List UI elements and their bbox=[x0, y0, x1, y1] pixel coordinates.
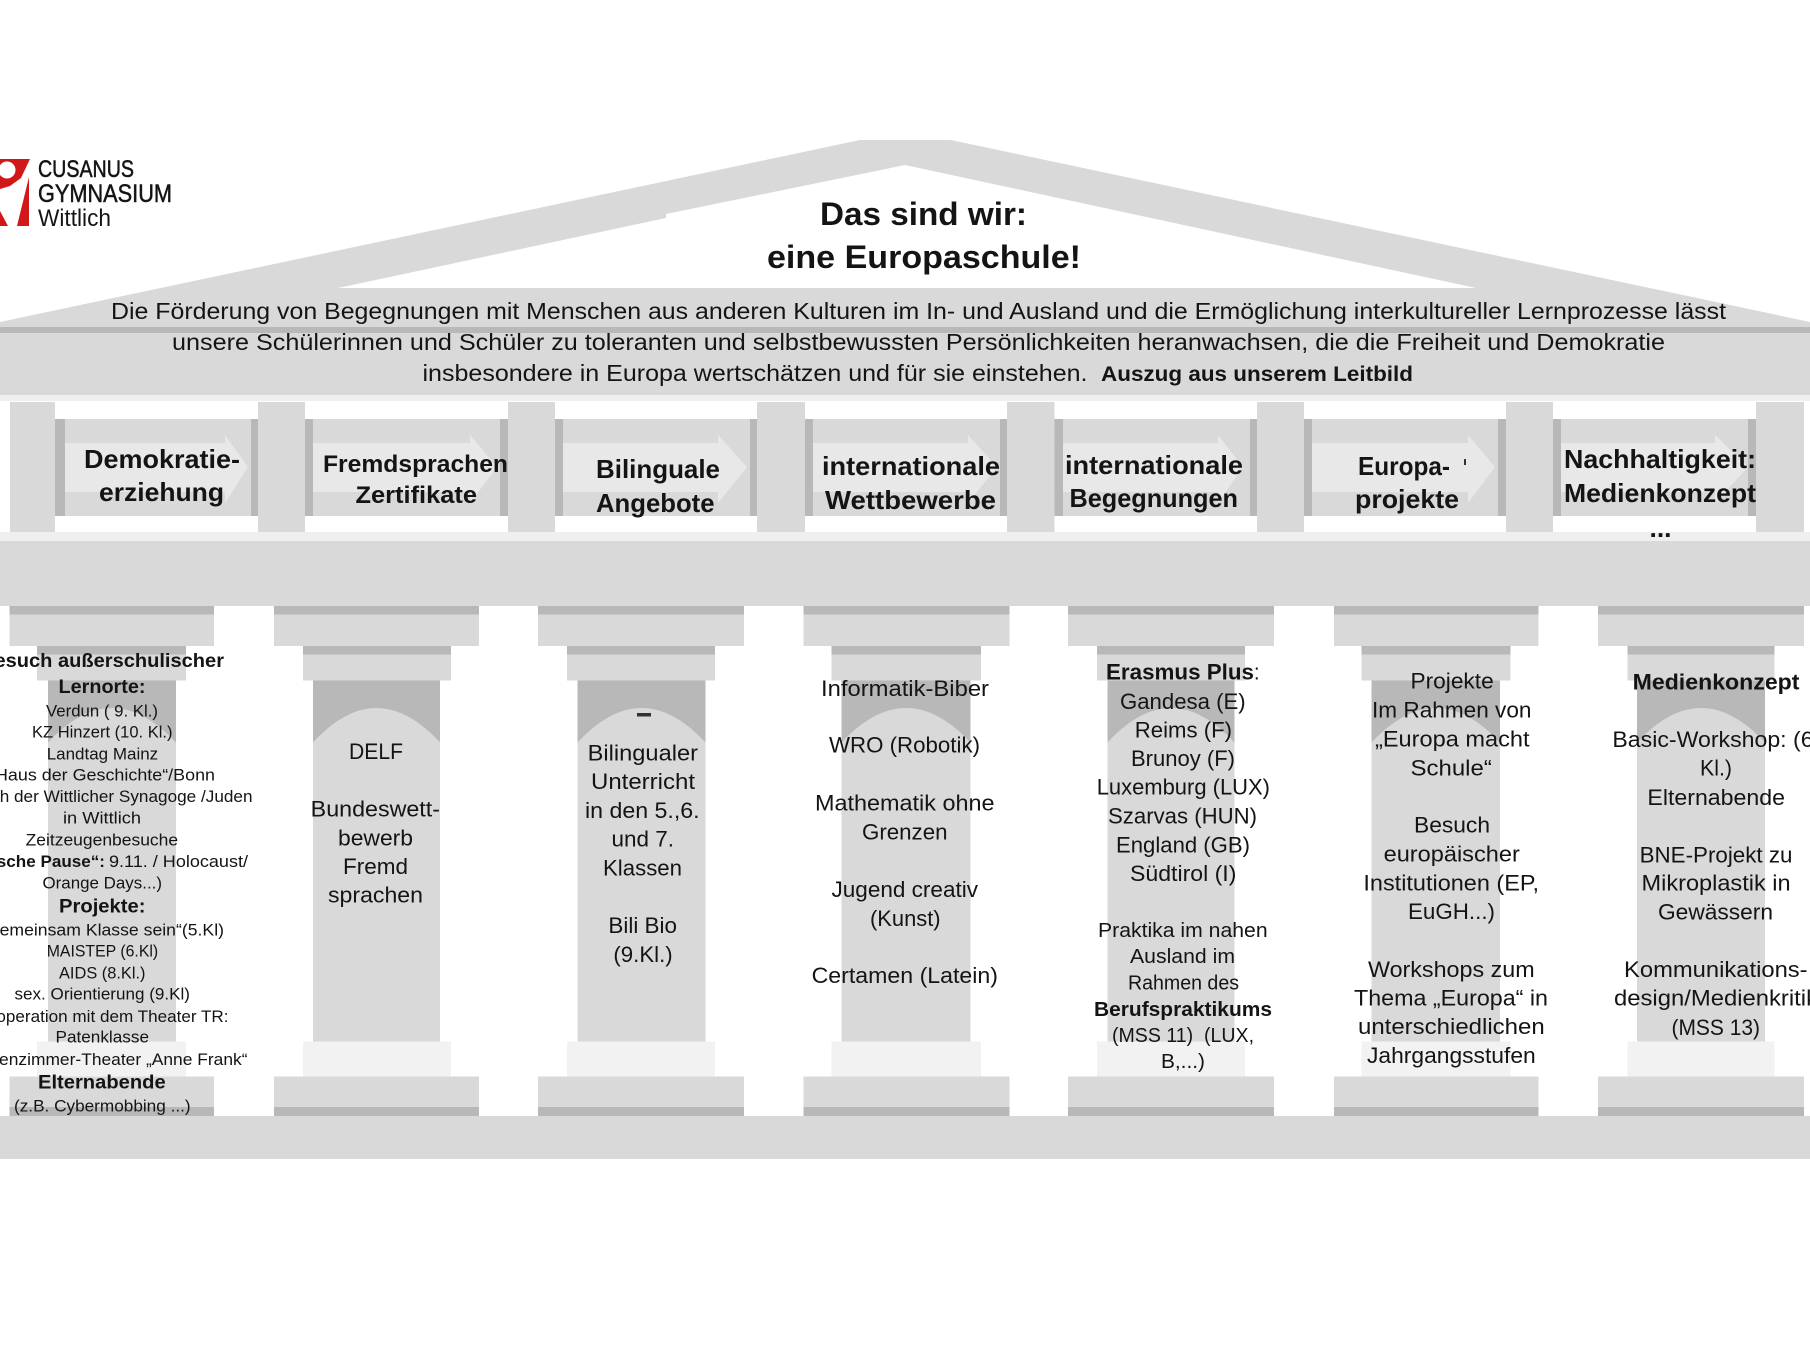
intro paragraph: insbesondere in Europa wertschätzen und für sie einstehen. bbox=[422, 360, 1088, 386]
frieze panel 6: projekte bbox=[1355, 484, 1459, 514]
column 6 text: Europaprojekte: Workshops zum bbox=[1368, 957, 1535, 982]
title bbox=[767, 196, 1081, 275]
column 6 text: Europaprojekte: Schule“ bbox=[1410, 756, 1492, 780]
column 7 text: Nachhaltigkeit und Medienkonzept: Mikroplastik in bbox=[1642, 871, 1791, 896]
logo: Cusanus Gymnasium Wittlich: Wittlich bbox=[38, 205, 111, 232]
column 5 text: internationale Begegnungen: Reims (F) bbox=[1135, 718, 1232, 743]
column 5 text: internationale Begegnungen: B,...) bbox=[1161, 1051, 1205, 1073]
column 3 text: Bilinguale Angebote: Bili Bio bbox=[608, 913, 677, 938]
column 7 text: Nachhaltigkeit und Medienkonzept: Elternabende bbox=[1647, 785, 1785, 810]
column 2 text: Fremdsprachen Zertifikate: Fremd bbox=[343, 854, 408, 879]
frieze panel 5: internationale bbox=[1065, 450, 1243, 480]
column 5 text: internationale Begegnungen: Szarvas (HUN) bbox=[1108, 804, 1257, 828]
column 2 text: Fremdsprachen Zertifikate bbox=[311, 739, 440, 908]
frieze panel 3: Angebote bbox=[596, 488, 714, 518]
column 7 text: Nachhaltigkeit und Medienkonzept bbox=[1612, 669, 1810, 1040]
column 7 text: Nachhaltigkeit und Medienkonzept: Kl.) bbox=[1700, 756, 1732, 780]
logo: Cusanus Gymnasium Wittlich bbox=[0, 156, 172, 232]
frieze panel 7: Medienkonzept bbox=[1564, 478, 1756, 508]
column 3 text: Bilinguale Angebote bbox=[585, 713, 700, 967]
column 5 text: internationale Begegnungen: Gandesa (E) bbox=[1120, 689, 1246, 714]
title: Das sind wir: bbox=[820, 196, 1027, 232]
column 5 text: internationale Begegnungen: Praktika im nahen bbox=[1098, 920, 1268, 942]
column 1 text: Demokratieerziehung: Patenklasse bbox=[56, 1028, 149, 1047]
column 2 text: Fremdsprachen Zertifikate: sprachen bbox=[328, 883, 423, 908]
column 6 text: Europaprojekte: unterschiedlichen bbox=[1358, 1014, 1545, 1039]
intro paragraph bbox=[111, 298, 1726, 386]
intro paragraph: Auszug aus unserem Leitbild bbox=[1101, 363, 1413, 386]
column 2 text: Fremdsprachen Zertifikate: DELF bbox=[349, 739, 403, 764]
column 5 text: internationale Begegnungen: Erasmus Plus bbox=[1106, 660, 1254, 685]
column 6 text: Europaprojekte: Thema „Europa“ in bbox=[1354, 986, 1548, 1011]
column 7 text: Nachhaltigkeit und Medienkonzept: Gewässern bbox=[1658, 900, 1773, 924]
column 6 text: Europaprojekte: Jahrgangsstufen bbox=[1367, 1043, 1536, 1068]
frieze panel 6: Europa- bbox=[1358, 451, 1450, 481]
column 4 text: internationale Wettbewerbe: (Kunst) bbox=[870, 906, 941, 931]
column 7 text: Nachhaltigkeit und Medienkonzept: Medienkonzept bbox=[1633, 669, 1800, 694]
column 3 shape bbox=[538, 606, 744, 1116]
column 2 text: Fremdsprachen Zertifikate: bewerb bbox=[338, 826, 413, 851]
frieze panel 1: erziehung bbox=[99, 477, 224, 507]
frieze panel 3: Bilinguale bbox=[596, 454, 720, 484]
frieze panel 4: internationale bbox=[822, 451, 1000, 481]
column 3 text: Bilinguale Angebote: Klassen bbox=[603, 856, 682, 881]
column 1 text: Demokratieerziehung: 9.11. / Holocaust/ bbox=[109, 852, 248, 871]
column 6 text: Europaprojekte: europäischer bbox=[1384, 842, 1520, 866]
frieze panel 5 bbox=[1054, 419, 1257, 516]
logo: Cusanus Gymnasium Wittlich: CUSANUS bbox=[38, 156, 134, 183]
column 2 shape bbox=[274, 606, 479, 1116]
frieze panel 7: Nachhaltigkeit: bbox=[1564, 444, 1756, 474]
column 3 text: Bilinguale Angebote: Bilingualer bbox=[588, 741, 698, 766]
column 3 text: Bilinguale Angebote: Unterricht bbox=[591, 769, 695, 794]
column 6 shape bbox=[1334, 606, 1538, 1116]
column 4 text: internationale Wettbewerbe bbox=[812, 676, 998, 988]
column 1 text: Demokratieerziehung: MAISTEP (6.Kl) bbox=[47, 942, 158, 961]
frieze panel 5: Begegnungen bbox=[1070, 483, 1238, 513]
column 7 text: Nachhaltigkeit und Medienkonzept: (MSS 13) bbox=[1672, 1015, 1760, 1040]
frieze panel 2: Zertifikate bbox=[356, 482, 477, 509]
column 4 text: internationale Wettbewerbe: Certamen (Latein) bbox=[812, 963, 998, 988]
column 1 text: Demokratieerziehung: KZ Hinzert (10. Kl.) bbox=[32, 723, 172, 742]
roof pediment bbox=[0, 140, 1810, 401]
frieze panel 4 bbox=[805, 419, 1007, 516]
column 6 text: Europaprojekte: EuGH...) bbox=[1408, 899, 1495, 924]
frieze posts bbox=[10, 402, 1804, 532]
column 7 text: Nachhaltigkeit und Medienkonzept: Basic-Workshop: (6. bbox=[1612, 727, 1810, 752]
column 1 text: Demokratieerziehung: Lernorte: bbox=[58, 676, 146, 698]
frieze panel 7 bbox=[1553, 419, 1756, 543]
column 5 text: internationale Begegnungen: Luxemburg (LUX) bbox=[1097, 775, 1270, 800]
column 6 text: Europaprojekte: Besuch bbox=[1414, 813, 1490, 838]
column 6 text: Europaprojekte: „Europa macht bbox=[1375, 727, 1530, 752]
column 1 shape bbox=[10, 606, 214, 1116]
column 4 text: internationale Wettbewerbe: Grenzen bbox=[862, 819, 948, 844]
frieze panel 6 bbox=[1304, 419, 1506, 516]
column 5 text: internationale Begegnungen bbox=[1094, 660, 1272, 1073]
column 5 text: internationale Begegnungen: Ausland im bbox=[1130, 946, 1235, 968]
column 7 text: Nachhaltigkeit und Medienkonzept: design/Medienkritik bbox=[1614, 986, 1810, 1011]
logo: Cusanus Gymnasium Wittlich: GYMNASIUM bbox=[38, 180, 172, 208]
column 5 text: internationale Begegnungen: Südtirol (I) bbox=[1130, 861, 1236, 886]
column 5 text: internationale Begegnungen: Berufspraktikums bbox=[1094, 999, 1272, 1021]
column 1 text: Demokratieerziehung: in Wittlich bbox=[63, 808, 141, 828]
column 4 shape bbox=[804, 606, 1010, 1116]
architrave beam bbox=[0, 532, 1810, 606]
frieze panel 7: ... bbox=[1650, 513, 1672, 543]
column 3 text: Bilinguale Angebote: (9.Kl.) bbox=[613, 942, 673, 967]
column 4 text: internationale Wettbewerbe: WRO (Robotik) bbox=[829, 732, 980, 758]
frieze panel 4: Wettbewerbe bbox=[825, 485, 996, 515]
column 6 text: Europaprojekte: Projekte bbox=[1410, 669, 1494, 694]
title: eine Europaschule! bbox=[767, 239, 1081, 275]
column 4 text: internationale Wettbewerbe: Jugend creativ bbox=[832, 877, 978, 902]
column 1 text: Demokratieerziehung: sex. Orientierung (9.Kl) bbox=[14, 985, 190, 1004]
column 1 text: Demokratieerziehung: Zeitzeugenbesuche bbox=[26, 831, 178, 850]
column 5 shape bbox=[1068, 606, 1274, 1116]
column 1 text: Demokratieerziehung: Projekte: bbox=[59, 895, 146, 917]
column 6 text: Europaprojekte bbox=[1354, 669, 1548, 1068]
column 5 text: internationale Begegnungen: England (GB) bbox=[1116, 832, 1250, 857]
column 4 text: internationale Wettbewerbe: Mathematik ohne bbox=[815, 790, 994, 815]
column 3 text: Bilinguale Angebote: und 7. bbox=[612, 827, 674, 852]
frieze panel 2: Fremdsprachen bbox=[323, 451, 508, 478]
column 5 text: internationale Begegnungen: Rahmen des bbox=[1128, 973, 1239, 995]
column 4 text: internationale Wettbewerbe: Informatik-Biber bbox=[821, 676, 989, 701]
column 1 text: Demokratieerziehung: Elternabende bbox=[38, 1071, 166, 1093]
foundation bbox=[0, 1116, 1810, 1159]
frieze panel 3 bbox=[555, 419, 757, 518]
frieze panel 1: Demokratie- bbox=[84, 444, 240, 474]
column 1 text: Demokratieerziehung: Verdun ( 9. Kl.) bbox=[46, 701, 158, 720]
column 1 text: Demokratieerziehung: Landtag Mainz bbox=[47, 744, 158, 763]
column 1 text: Demokratieerziehung bbox=[0, 650, 252, 1116]
column 6 text: Europaprojekte: Institutionen (EP, bbox=[1363, 870, 1539, 895]
column 7 shape bbox=[1598, 606, 1804, 1116]
column 5 text: internationale Begegnungen: (MSS 11) (LUX, bbox=[1112, 1025, 1254, 1047]
column 5 text: internationale Begegnungen: : bbox=[1254, 660, 1260, 685]
column 2 text: Fremdsprachen Zertifikate: Bundeswett- bbox=[311, 797, 440, 822]
column 1 text: Demokratieerziehung: AIDS (8.Kl.) bbox=[59, 963, 146, 982]
intro paragraph: unsere Schülerinnen und Schüler zu toleranten und selbstbewussten Persönlichkeiten heranwachsen, die die Freiheit und Demokratie bbox=[172, 329, 1665, 355]
column 1 text: Demokratieerziehung: Orange Days...) bbox=[42, 874, 162, 893]
intro paragraph: Die Förderung von Begegnungen mit Menschen aus anderen Kulturen im In- und Ausland und die Ermöglichung interkultureller Lernprozesse lässt bbox=[111, 298, 1726, 324]
frieze panel 1 bbox=[55, 419, 258, 516]
column 6 text: Europaprojekte: Im Rahmen von bbox=[1372, 698, 1532, 722]
column 5 text: internationale Begegnungen: Brunoy (F) bbox=[1131, 746, 1235, 771]
column 1 text: Demokratieerziehung: (z.B. Cybermobbing ...) bbox=[14, 1097, 191, 1116]
column 3 text: Bilinguale Angebote: in den 5.,6. bbox=[585, 798, 700, 823]
column 7 text: Nachhaltigkeit und Medienkonzept: Kommunikations- bbox=[1624, 957, 1808, 982]
column 7 text: Nachhaltigkeit und Medienkonzept: BNE-Projekt zu bbox=[1640, 842, 1792, 867]
frieze panel 2 bbox=[305, 419, 508, 516]
